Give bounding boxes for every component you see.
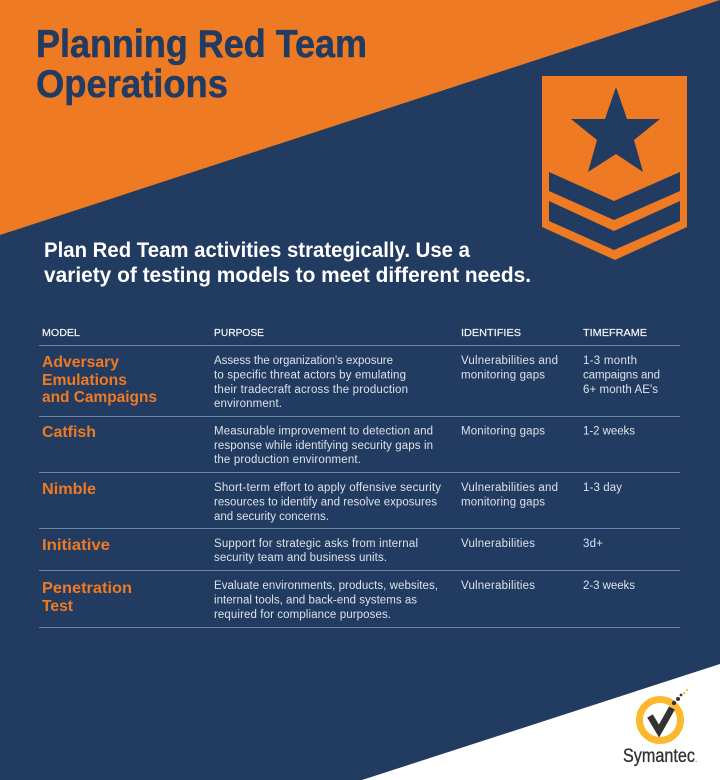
table header: [42, 327, 647, 339]
table row: Catfish: response while identifying security gaps in: [214, 440, 433, 452]
table row: Adversary Emulations and Campaigns: 1-3 month: [583, 355, 637, 367]
table row: Adversary Emulations and Campaigns: monitoring gaps: [461, 370, 545, 382]
table row: Nimble: resources to identify and resolve exposures: [214, 496, 437, 508]
Symantec logo: .: [695, 755, 697, 764]
table row: Initiative: security team and business units.: [214, 552, 387, 564]
table row: Adversary Emulations and Campaigns: environment.: [214, 398, 282, 410]
table row: Adversary Emulations and Campaigns: campaigns and: [583, 370, 660, 382]
table row: Penetration Test: 2-3 weeks: [583, 580, 635, 592]
table row: Penetration Test: [42, 580, 635, 621]
table row: Initiative: Support for strategic asks from internal: [214, 538, 418, 550]
table row: Catfish: [42, 424, 635, 466]
table row: Adversary Emulations and Campaigns: and Campaigns: [42, 389, 157, 406]
table row: Initiative: Vulnerabilities: [461, 538, 535, 550]
table row: Penetration Test: Test: [42, 598, 74, 615]
table row: Catfish: Catfish: [42, 424, 96, 441]
white corner: [362, 664, 720, 780]
table row: Penetration Test: Penetration: [42, 580, 132, 597]
table row: Adversary Emulations and Campaigns: their tradecraft across the production: [214, 384, 408, 396]
table row: Adversary Emulations and Campaigns: 6+ month AE's: [583, 384, 658, 396]
table row: Nimble: Vulnerabilities and: [461, 482, 558, 494]
table row: Adversary Emulations and Campaigns: [42, 354, 660, 410]
table row: Penetration Test: Vulnerabilities: [461, 580, 535, 592]
table row: Adversary Emulations and Campaigns: Assess the organization's exposure: [214, 355, 393, 367]
table row: Nimble: monitoring gaps: [461, 496, 545, 508]
table header: TIMEFRAME: [583, 327, 647, 339]
orange header banner: [0, 0, 720, 235]
title: Planning Red Team: [36, 23, 367, 66]
intro text: variety of testing models to meet different needs.: [44, 264, 531, 287]
table row: Nimble: [42, 481, 622, 523]
table row: Catfish: the production environment.: [214, 454, 361, 466]
table header: MODEL: [42, 327, 80, 339]
table row: Initiative: 3d+: [583, 538, 603, 550]
table row: Adversary Emulations and Campaigns: Adversary: [42, 354, 119, 371]
table row: Penetration Test: required for compliance purposes.: [214, 609, 391, 621]
icon: rank shield with star and chevrons: [542, 76, 687, 260]
table row: Nimble: Short-term effort to apply offensive security: [214, 482, 441, 494]
table row: Adversary Emulations and Campaigns: to specific threat actors by emulating: [214, 370, 406, 382]
table row: Penetration Test: Evaluate environments, products, websites,: [214, 580, 438, 592]
table row: Nimble: Nimble: [42, 481, 96, 498]
Symantec logo: [623, 689, 697, 767]
table row: Initiative: Initiative: [42, 537, 110, 554]
title: [36, 23, 367, 106]
table row: Catfish: Monitoring gaps: [461, 426, 545, 438]
table row: Catfish: Measurable improvement to detection and: [214, 426, 433, 438]
table header: PURPOSE: [214, 327, 264, 339]
table row: Initiative: [42, 537, 603, 564]
table row: Adversary Emulations and Campaigns: Vulnerabilities and: [461, 355, 558, 367]
title: Operations: [36, 63, 228, 106]
intro text: Plan Red Team activities strategically. Use a: [44, 239, 470, 262]
Symantec logo: Symantec: [623, 746, 695, 767]
table row: Nimble: 1-3 day: [583, 482, 622, 494]
table row: Penetration Test: internal tools, and back-end systems as: [214, 594, 417, 606]
intro text: [44, 239, 531, 287]
table row: Adversary Emulations and Campaigns: Emulations: [42, 372, 127, 389]
table row: Catfish: 1-2 weeks: [583, 426, 635, 438]
table row: Nimble: and security concerns.: [214, 511, 329, 523]
table header: IDENTIFIES: [461, 327, 521, 339]
